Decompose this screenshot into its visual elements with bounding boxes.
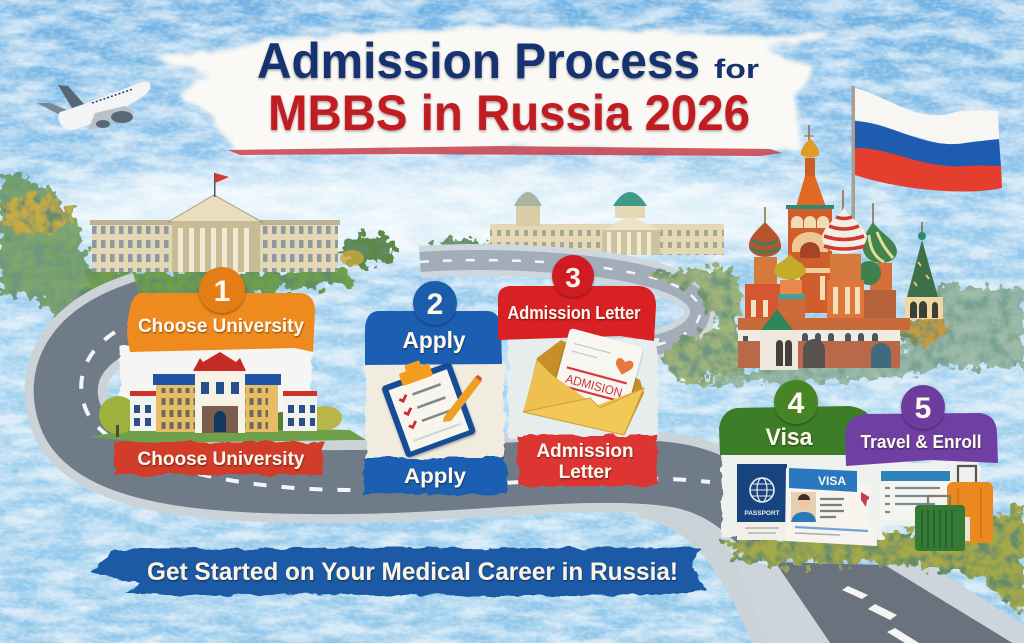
trees right of left university bbox=[340, 233, 394, 267]
step 4 header banner bbox=[719, 406, 868, 455]
building: distant university center bbox=[430, 192, 724, 255]
step 3: admission letter bbox=[498, 255, 658, 486]
step 2 number badge: 2 bbox=[427, 288, 443, 321]
title line 1: Admission Process bbox=[257, 33, 700, 89]
step 5 header banner bbox=[845, 413, 998, 466]
step 3 red brush label: Admission bbox=[536, 441, 634, 462]
cathedral yellow dome tower bbox=[774, 254, 806, 318]
call to action text: Get Started on Your Medical Career in Russia! bbox=[147, 558, 678, 586]
icon: passport bbox=[737, 464, 787, 540]
step 5 paper backdrop bbox=[870, 462, 980, 527]
step 4: visa bbox=[719, 380, 882, 546]
step 3 number badge: 3 bbox=[565, 262, 581, 293]
icon: airplane bbox=[37, 82, 151, 130]
greenery beside road and cathedral bbox=[640, 265, 1024, 385]
step 3 red brush label: Letter bbox=[559, 462, 612, 483]
cathedral base wall bbox=[738, 309, 910, 370]
step 1 number badge bbox=[199, 267, 245, 313]
step 2 blue brush label: Apply bbox=[404, 465, 466, 488]
cathedral left tower with striped dome bbox=[743, 207, 782, 330]
step 2 blue brush bbox=[364, 458, 506, 495]
red underline stroke bbox=[228, 146, 782, 156]
step 4 paper backdrop bbox=[722, 450, 882, 538]
icon: ticket bbox=[880, 470, 952, 520]
title line 2: MBBS in Russia 2026 bbox=[268, 85, 750, 141]
call to action banner bbox=[92, 547, 705, 596]
road: pale shoulder joining lower road bbox=[640, 506, 765, 643]
cathedral right green dome bbox=[857, 203, 897, 325]
road: upper bend bbox=[420, 260, 700, 352]
icon: visa card: VISA bbox=[818, 474, 846, 488]
step 5 number badge: 5 bbox=[915, 392, 931, 425]
step 5: travel and enroll bbox=[845, 385, 998, 551]
title word: for: for bbox=[714, 54, 760, 84]
icon: envelope with admission letter bbox=[523, 328, 644, 435]
icon: envelope with admission letter: ADMISION bbox=[564, 372, 624, 400]
step 5 number badge bbox=[901, 385, 945, 429]
step 1 heading: Choose University bbox=[138, 316, 304, 337]
step 3 red brush bbox=[518, 435, 657, 486]
icon: green suitcase bbox=[915, 496, 970, 551]
cathedral right spire tower bbox=[905, 222, 943, 319]
cathedral central tower bbox=[786, 125, 834, 313]
cathedral red and white dome bbox=[822, 190, 867, 322]
road: lower right exit bbox=[735, 560, 1024, 643]
step 2 number badge bbox=[413, 281, 457, 325]
step 4 number badge bbox=[774, 380, 818, 424]
step 1 paper backdrop bbox=[120, 345, 312, 415]
step 1 red brush bbox=[115, 442, 323, 475]
grass below left university bbox=[85, 268, 350, 312]
step 1 red brush label: Choose University bbox=[138, 449, 305, 470]
step 3 paper backdrop bbox=[508, 338, 658, 438]
step 3 header banner bbox=[498, 286, 656, 341]
step 1 header banner bbox=[127, 293, 315, 352]
title banner bbox=[150, 28, 830, 156]
step 3 heading: Admission Letter bbox=[508, 303, 640, 323]
step 1 number badge: 1 bbox=[214, 275, 230, 308]
icon: orange suitcase bbox=[947, 466, 993, 543]
step 5 heading: Travel & Enroll bbox=[860, 432, 982, 452]
building: distant university left bbox=[90, 173, 340, 272]
step 2 paper backdrop bbox=[366, 362, 504, 462]
step 2: apply bbox=[364, 281, 506, 495]
step 1: choose university bbox=[90, 267, 366, 475]
grass under steps four and five bbox=[718, 505, 1024, 615]
step 2 heading: Apply bbox=[402, 327, 466, 353]
step 4 number badge: 4 bbox=[788, 387, 805, 420]
step 3 number badge bbox=[552, 255, 594, 297]
flag of Russia with pole bbox=[852, 86, 1002, 231]
distant forest left bbox=[0, 175, 130, 345]
icon: visa card bbox=[785, 468, 877, 546]
icon: clipboard and pencil bbox=[377, 350, 482, 458]
step 4 heading: Visa bbox=[766, 424, 813, 451]
icon: passport: PASSPORT bbox=[744, 510, 780, 517]
step 2 header banner bbox=[365, 311, 502, 365]
step 1 university illustration bbox=[90, 352, 366, 443]
road: main loop bbox=[66, 312, 775, 535]
Saint Basil's Cathedral bbox=[738, 125, 943, 370]
